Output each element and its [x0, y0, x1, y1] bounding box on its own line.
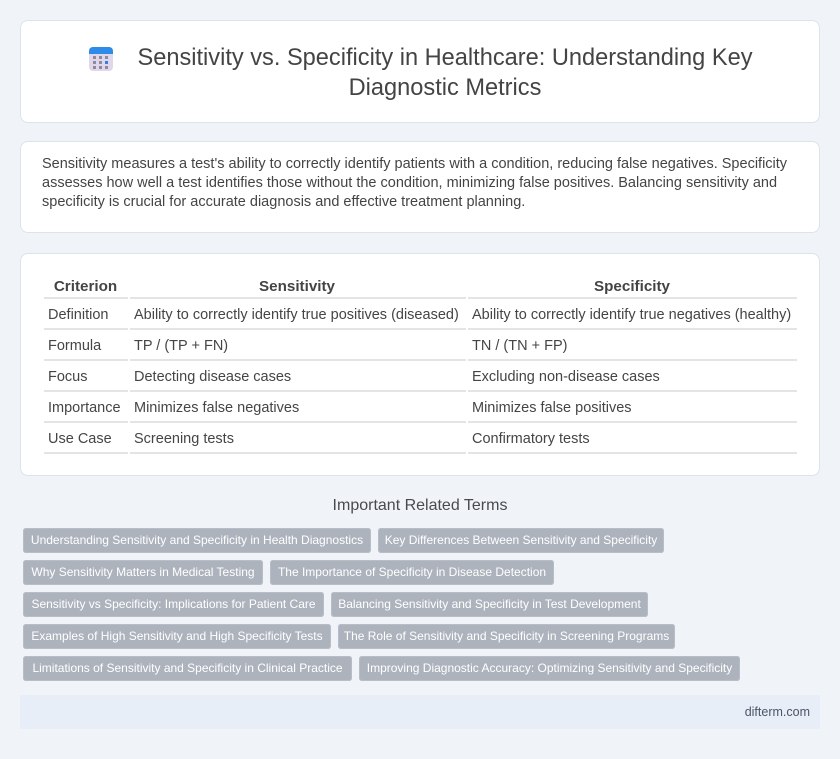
- intro paragraph: specificity is crucial for accurate diagnosis and effective treatment planning.: [42, 194, 525, 210]
- tag: The Importance of Specificity in Disease Detection: [278, 565, 546, 579]
- column headers: Specificity: [594, 278, 670, 294]
- column headers: Sensitivity: [259, 278, 335, 294]
- footer brand: difterm.com: [745, 705, 810, 719]
- title: Sensitivity vs. Specificity in Healthcare: Understanding Key Diagnostic Metrics: [137, 45, 753, 100]
- row: formula: [48, 338, 567, 354]
- footer bar: [20, 695, 820, 729]
- column headers: Criterion: [54, 278, 117, 294]
- row: use case: Use Case: [48, 431, 112, 447]
- tag: Why Sensitivity Matters in Medical Testing: [31, 565, 255, 579]
- row: use case: Screening tests: [134, 431, 234, 447]
- row: importance: [48, 400, 632, 416]
- tag: Examples of High Sensitivity and High Specificity Tests: [31, 629, 323, 643]
- row: definition: Ability to correctly identify true negatives (healthy): [472, 307, 791, 323]
- row: definition: Ability to correctly identify true positives (diseased): [134, 307, 459, 323]
- row: focus: Focus: [48, 369, 88, 385]
- tag: [270, 560, 554, 585]
- tag: [23, 656, 352, 681]
- icon: calendar: [89, 47, 113, 71]
- intro paragraph: [42, 156, 787, 210]
- tag: [331, 592, 648, 617]
- row: formula: TP / (TP + FN): [134, 338, 228, 354]
- related term tags: [23, 528, 740, 681]
- tag: Key Differences Between Sensitivity and Specificity: [385, 533, 657, 547]
- intro text panel: [20, 141, 820, 233]
- row: formula: Formula: [48, 338, 101, 354]
- row: focus: [48, 369, 660, 385]
- tag: Understanding Sensitivity and Specificity in Health Diagnostics: [31, 533, 363, 547]
- header panel: [20, 20, 820, 123]
- row: focus: Detecting disease cases: [134, 369, 291, 385]
- tag: Sensitivity vs Specificity: Implications for Patient Care: [31, 597, 316, 611]
- tag: [23, 528, 371, 553]
- tag: [378, 528, 664, 553]
- tag: Limitations of Sensitivity and Specificity in Clinical Practice: [32, 661, 343, 675]
- row: use case: [48, 431, 590, 447]
- intro paragraph: assesses how well a test identifies those without the condition, minimizing false positives. Balancing sensitivity and: [42, 175, 777, 191]
- intro paragraph: Sensitivity measures a test's ability to correctly identify patients with a condition, reducing false negatives. Specificity: [42, 156, 787, 172]
- row: definition: Definition: [48, 307, 108, 323]
- row: definition: [48, 307, 791, 323]
- row: importance: Minimizes false negatives: [134, 400, 299, 416]
- tag: The Role of Sensitivity and Specificity in Screening Programs: [344, 629, 669, 643]
- tag: Improving Diagnostic Accuracy: Optimizing Sensitivity and Specificity: [367, 661, 732, 675]
- tag: [338, 624, 675, 649]
- column headers: [54, 278, 670, 294]
- tag: [23, 624, 331, 649]
- comparison table panel: [20, 253, 820, 476]
- row: importance: Minimizes false positives: [472, 400, 632, 416]
- tag: [359, 656, 740, 681]
- comparison table: [44, 278, 797, 454]
- tag: [23, 560, 263, 585]
- row: formula: TN / (TN + FP): [472, 338, 567, 354]
- related terms heading: Important Related Terms: [333, 497, 507, 514]
- row: use case: Confirmatory tests: [472, 431, 590, 447]
- row: importance: Importance: [48, 400, 121, 416]
- tag: Balancing Sensitivity and Specificity in Test Development: [338, 597, 641, 611]
- tag: [23, 592, 324, 617]
- row: focus: Excluding non-disease cases: [472, 369, 660, 385]
